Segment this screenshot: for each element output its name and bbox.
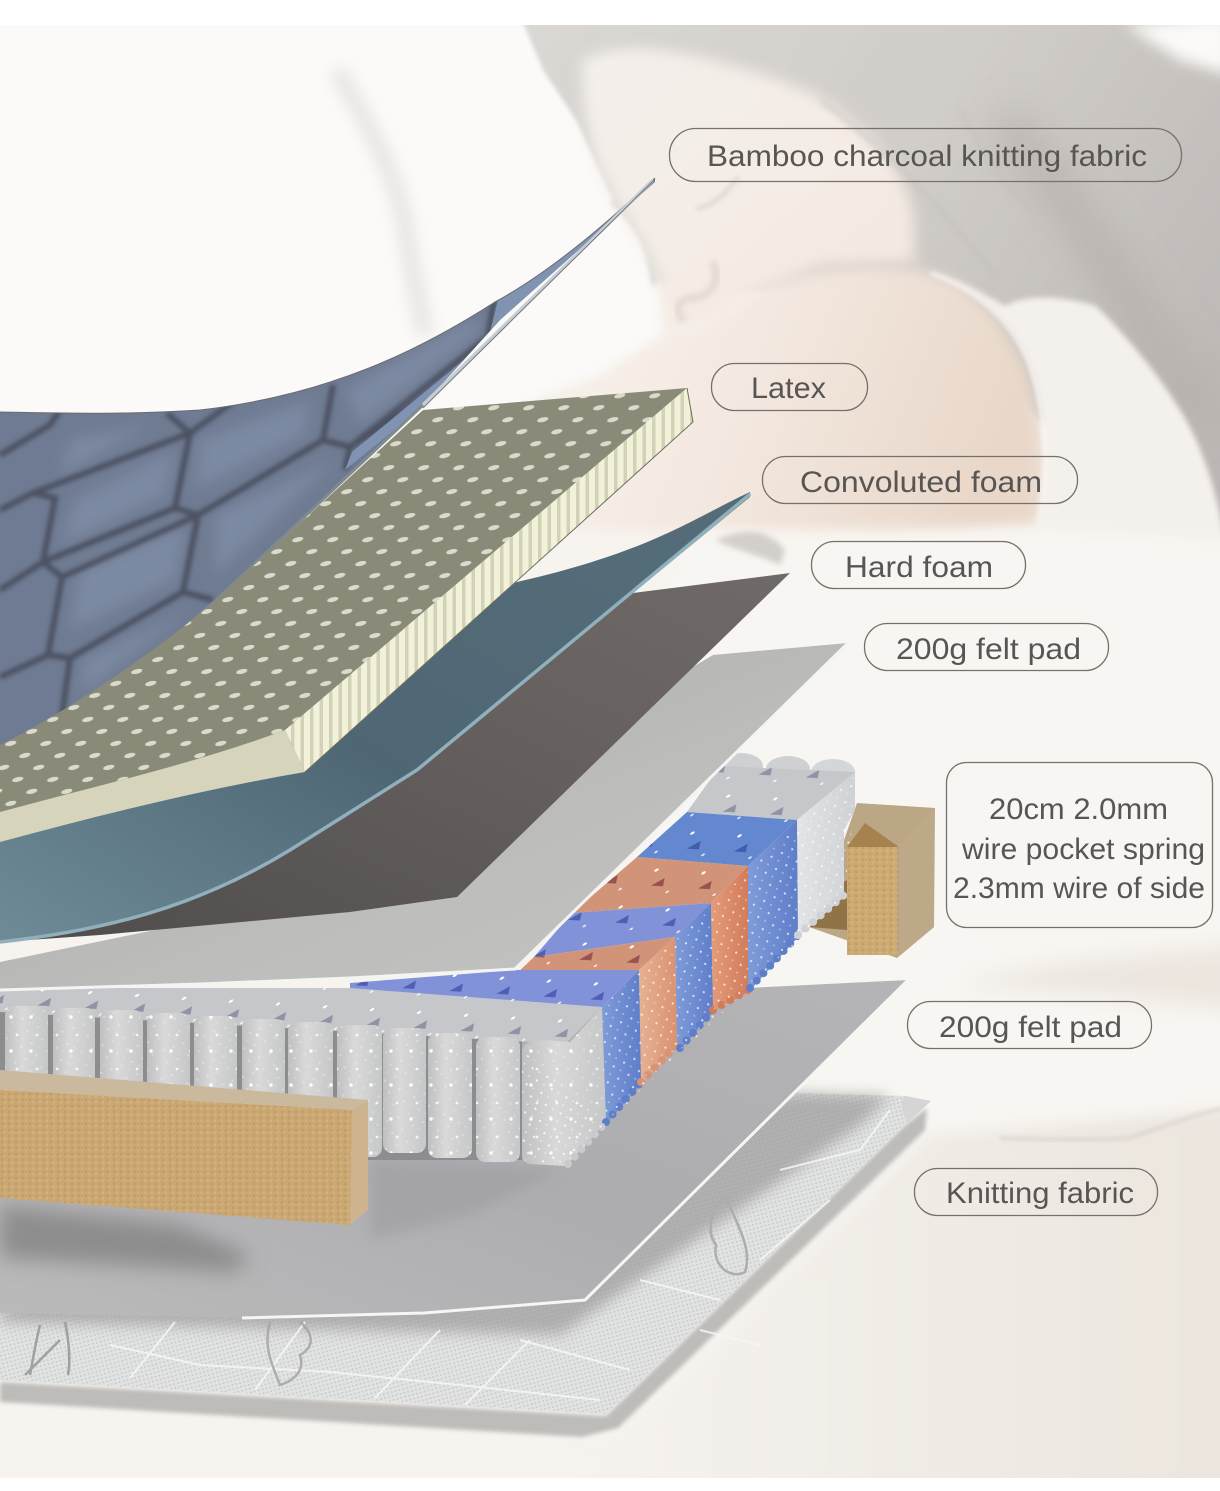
spring side: orange 1 — [639, 937, 677, 1084]
spring tops: periwinkle — [534, 903, 711, 957]
knitting fabric layer — [0, 1093, 931, 1437]
spring tops: white rear block — [687, 753, 855, 820]
latex ribbed side — [285, 388, 693, 772]
label: Bamboo charcoal knitting fabric — [670, 128, 1182, 182]
spring side: blue 3 — [748, 820, 798, 992]
label: pocket spring specification: 2.3mm wire of side — [953, 872, 1205, 905]
label: Hard foam — [812, 542, 1026, 588]
latex layer — [0, 388, 693, 842]
spring tops: orange — [572, 857, 748, 913]
scalloped column bottoms — [568, 895, 844, 1164]
spring tops: white front — [0, 988, 602, 1044]
sheet folds — [709, 526, 1220, 570]
label: 200g felt pad, lower: 200g felt pad — [939, 1011, 1122, 1044]
latex top surface — [0, 388, 687, 812]
rail shadow — [0, 1205, 250, 1272]
shirt — [955, 280, 1220, 546]
cloud logo marks on fabric — [267, 1322, 311, 1385]
spring tops: orange front — [520, 937, 675, 970]
label: Convoluted foam — [762, 456, 1078, 504]
label: 200g felt pad, upper — [864, 624, 1108, 670]
label: 200g felt pad, upper: 200g felt pad — [896, 633, 1081, 666]
label: Hard foam: Hard foam — [845, 551, 993, 584]
spring tops: blue front — [350, 970, 639, 1007]
quilt seams and cushions — [0, 178, 655, 715]
dark gaps behind front columns — [0, 1000, 522, 1160]
200g felt pad, upper layer — [0, 643, 848, 990]
label: Latex: Latex — [751, 372, 826, 405]
back tan side rail — [809, 803, 935, 958]
nose and lips shading — [678, 262, 716, 322]
closed eye lashes — [697, 177, 738, 209]
pillow — [490, 25, 658, 290]
shoulder — [582, 266, 1044, 532]
spring side: blue 2 — [675, 903, 713, 1050]
spring tops: blue — [637, 812, 797, 866]
label: pocket spring specification: 20cm 2.0mm — [989, 793, 1168, 826]
front tan block on the right — [847, 808, 934, 958]
label: 200g felt pad, lower — [908, 1002, 1152, 1048]
label: pocket spring specification: wire pocket spring — [961, 833, 1205, 866]
label: Convoluted foam: Convoluted foam — [800, 466, 1042, 499]
spring side: orange 2 — [711, 866, 748, 1012]
front row spring columns — [5, 1006, 606, 1166]
label: Bamboo charcoal knitting fabric: Bamboo charcoal knitting fabric — [707, 140, 1147, 173]
front tan side rail — [0, 1070, 368, 1225]
200g felt pad, dark layer — [0, 573, 790, 942]
spring side: blue 1 — [602, 970, 641, 1124]
hard foam layer — [0, 492, 750, 942]
label: Knitting fabric — [914, 1168, 1158, 1216]
face — [582, 49, 915, 335]
pocket springs — [0, 753, 855, 1166]
spring side: white rear — [797, 772, 855, 937]
label: Knitting fabric: Knitting fabric — [946, 1177, 1134, 1210]
label: Latex — [712, 364, 868, 410]
top bamboo charcoal quilted fabric — [0, 178, 655, 750]
200g felt pad, lower layer — [0, 980, 908, 1318]
label: pocket spring specification — [946, 762, 1212, 928]
sparkle overlay on side faces — [522, 772, 855, 1166]
hair strands near temple — [822, 102, 890, 160]
latex front edge — [0, 730, 305, 842]
